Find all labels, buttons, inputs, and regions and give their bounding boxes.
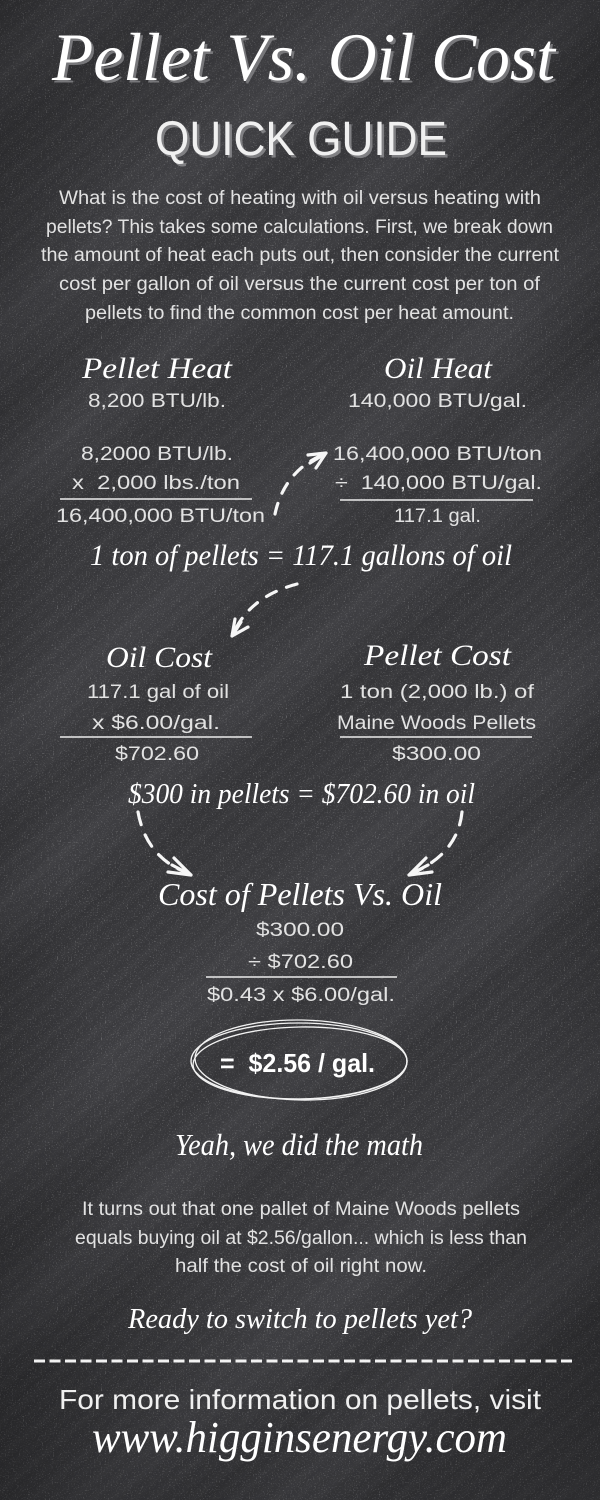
handwritten note: Yeah, we did the math bbox=[175, 1127, 423, 1162]
footer url: www.higginsenergy.com bbox=[92, 1413, 507, 1462]
arrow: left curve to cost comparison bbox=[138, 812, 191, 875]
intro paragraph: pellets? This takes some calculations. First, we break down bbox=[46, 217, 553, 238]
panel: oil heat: 117.1 gal. bbox=[394, 506, 481, 527]
intro paragraph: pellets to find the common cost per heat amount. bbox=[85, 303, 514, 324]
equivalence statement: heat: 1 ton of pellets = 117.1 gallons of oil bbox=[90, 539, 512, 572]
conclusion paragraph: equals buying oil at $2.56/gallon... which is less than bbox=[75, 1228, 527, 1249]
intro paragraph bbox=[41, 188, 560, 324]
intro paragraph: cost per gallon of oil versus the current cost per ton of bbox=[59, 274, 541, 295]
callout: circled result: = $2.56 / gal. bbox=[220, 1048, 375, 1078]
panel: pellet cost: 1 ton (2,000 lb.) of bbox=[340, 682, 535, 703]
panel: oil cost bbox=[60, 641, 252, 765]
arrow: pellet heat to oil heat bbox=[275, 453, 326, 514]
arrow: right curve to cost comparison bbox=[409, 812, 462, 875]
subtitle: quick guide: QUICK GUIDE bbox=[158, 116, 450, 168]
panel: cost of pellets vs oil: $0.43 x $6.00/gal. bbox=[207, 985, 395, 1006]
panel: cost of pellets vs oil: ÷ $702.60 bbox=[248, 952, 353, 973]
panel: oil heat bbox=[333, 352, 542, 527]
panel: oil heat: 16,400,000 BTU/ton bbox=[333, 444, 542, 465]
panel: oil cost: Oil Cost bbox=[106, 641, 213, 674]
conclusion paragraph: half the cost of oil right now. bbox=[175, 1256, 427, 1277]
panel: oil cost: x $6.00/gal. bbox=[92, 713, 220, 734]
title: Pellet Vs. Oil Cost bbox=[51, 19, 557, 95]
panel: pellet heat: 16,400,000 BTU/ton bbox=[56, 506, 265, 527]
panel: pellet cost: Maine Woods Pellets bbox=[337, 713, 536, 734]
panel: pellet cost: Pellet Cost bbox=[363, 639, 512, 672]
panel: oil heat: Oil Heat bbox=[384, 352, 493, 385]
handwritten question: Ready to switch to pellets yet? bbox=[127, 1303, 472, 1335]
equivalence statement: cost: $300 in pellets = $702.60 in oil bbox=[128, 779, 475, 810]
panel: cost of pellets vs oil: $300.00 bbox=[256, 920, 344, 941]
panel: pellet cost bbox=[337, 639, 536, 765]
panel: cost of pellets vs oil: Cost of Pellets Vs. Oil bbox=[158, 876, 442, 912]
subtitle: quick guide: QUICK GUIDE bbox=[155, 113, 447, 166]
conclusion paragraph bbox=[75, 1199, 527, 1277]
panel: cost of pellets vs oil bbox=[158, 876, 442, 1006]
callout: circled result bbox=[191, 1018, 408, 1102]
intro paragraph: What is the cost of heating with oil versus heating with bbox=[59, 188, 541, 209]
arrow: equivalence to oil cost bbox=[232, 584, 297, 636]
title: Pellet Vs. Oil Cost bbox=[54, 22, 560, 98]
panel: pellet heat bbox=[56, 352, 265, 527]
conclusion paragraph: It turns out that one pallet of Maine Woods pellets bbox=[82, 1199, 520, 1220]
panel: pellet heat: 8,2000 BTU/lb. bbox=[81, 444, 233, 465]
panel: pellet cost: $300.00 bbox=[392, 744, 481, 765]
panel: oil heat: ÷ 140,000 BTU/gal. bbox=[335, 473, 542, 494]
panel: pellet heat: Pellet Heat bbox=[81, 352, 233, 385]
panel: pellet heat: x 2,000 lbs./ton bbox=[72, 473, 240, 494]
panel: oil cost: 117.1 gal of oil bbox=[87, 682, 229, 703]
panel: pellet heat: 8,200 BTU/lb. bbox=[88, 391, 226, 412]
footer text: For more information on pellets, visit bbox=[59, 1384, 541, 1415]
panel: oil cost: $702.60 bbox=[115, 744, 199, 765]
intro paragraph: the amount of heat each puts out, then consider the current bbox=[41, 245, 560, 266]
panel: oil heat: 140,000 BTU/gal. bbox=[348, 391, 527, 412]
